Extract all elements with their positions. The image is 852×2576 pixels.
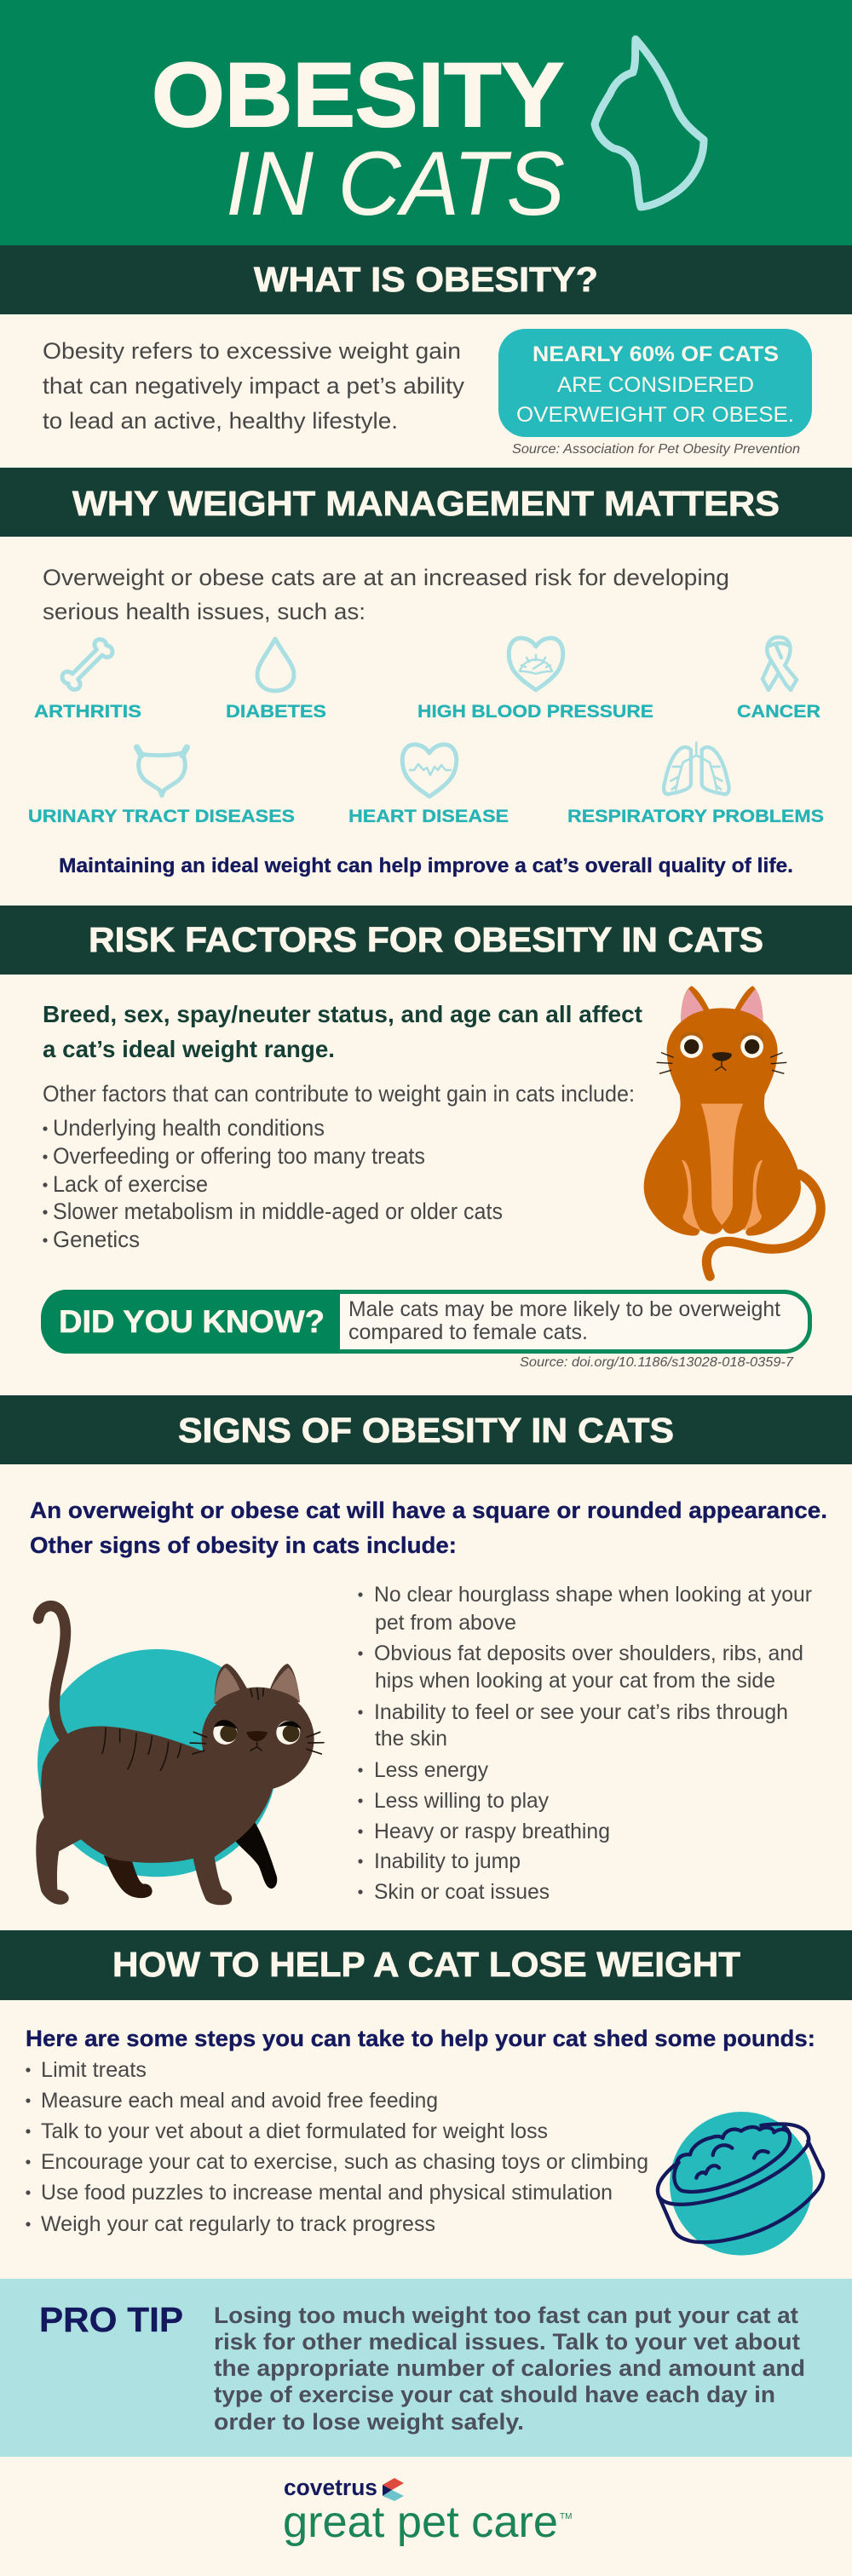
logo: covetrus great pet care xyxy=(283,2475,572,2547)
title xyxy=(152,43,565,234)
label: arthritis: ARTHRITIS xyxy=(34,702,141,722)
bold intro xyxy=(30,1498,827,1558)
definition text: to lead an active, healthy lifestyle. xyxy=(43,408,398,434)
steps list: Talk to your vet about a diet formulated for weight loss xyxy=(41,2119,548,2143)
pro tip label: PRO TIP xyxy=(39,2300,183,2339)
closing statement: Maintaining an ideal weight can help improve a cat’s overall quality of life. xyxy=(59,854,793,877)
pro tip text: the appropriate number of calories and amount and xyxy=(214,2355,805,2381)
icon: food bowl xyxy=(658,2112,823,2256)
definition text xyxy=(43,338,465,434)
factor list: Underlying health conditions xyxy=(53,1115,325,1141)
factor list: Other factors that can contribute to weight gain in cats include: xyxy=(43,1081,635,1107)
section: signs of obesity xyxy=(0,1395,852,1905)
title: IN CATS xyxy=(226,132,565,234)
logo: covetrus great pet care: covetrus xyxy=(284,2475,377,2500)
icon: lungs xyxy=(664,743,729,794)
factor list: Lack of exercise xyxy=(53,1171,208,1197)
steps list: Weigh your cat regularly to track progress xyxy=(41,2212,435,2236)
signs list: Inability to feel or see your cat’s ribs through xyxy=(374,1700,788,1724)
pro tip text: Losing too much weight too fast can put your cat at xyxy=(214,2303,798,2328)
icon: covetrus mark xyxy=(383,2478,404,2501)
signs list: Inability to jump xyxy=(374,1849,521,1873)
icon: ribbon xyxy=(763,637,797,690)
heading: SIGNS OF OBESITY IN CATS xyxy=(178,1411,674,1450)
icon: bone xyxy=(60,636,115,693)
intro text: serious health issues, such as: xyxy=(43,599,366,624)
callout: did you know xyxy=(41,1290,809,1354)
icon: cat outline xyxy=(595,39,704,207)
heading: HOW TO HELP A CAT LOSE WEIGHT xyxy=(112,1945,740,1984)
callout: nearly 60%: OVERWEIGHT OR OBESE. xyxy=(516,403,794,427)
icon: drop xyxy=(257,639,294,691)
heading: WHY WEIGHT MANAGEMENT MATTERS xyxy=(72,484,780,523)
bold intro: a cat’s ideal weight range. xyxy=(43,1036,335,1062)
label: respiratory problems: RESPIRATORY PROBLEMS xyxy=(567,807,824,826)
header panel xyxy=(0,0,852,245)
section: how to help xyxy=(0,1930,852,2256)
factor list: Genetics xyxy=(53,1227,140,1252)
pro tip text: risk for other medical issues. Talk to your vet about xyxy=(214,2329,800,2355)
steps list: Use food puzzles to increase mental and physical stimulation xyxy=(41,2181,613,2205)
intro text: Overweight or obese cats are at an increased risk for developing xyxy=(43,565,729,590)
signs list: Obvious fat deposits over shoulders, ribs, and xyxy=(374,1642,803,1665)
callout: did you know: Male cats may be more likely to be overweight xyxy=(348,1297,780,1321)
icon: heart with gauge xyxy=(509,638,563,690)
section: risk factors xyxy=(0,906,852,1370)
bold intro: Here are some steps you can take to help your cat shed some pounds: xyxy=(26,2026,815,2051)
label: urinary tract diseases: URINARY TRACT DISEASES xyxy=(28,807,295,826)
bold intro xyxy=(43,1001,642,1062)
callout: did you know: compared to female cats. xyxy=(348,1320,588,1344)
label: high blood pressure: HIGH BLOOD PRESSURE xyxy=(417,702,653,722)
callout: nearly 60% xyxy=(498,329,812,437)
label: heart disease: HEART DISEASE xyxy=(348,807,509,826)
signs list: pet from above xyxy=(375,1611,516,1635)
signs list: Heavy or raspy breathing xyxy=(374,1820,610,1843)
illustration: orange sitting cat xyxy=(644,986,820,1276)
bold intro: An overweight or obese cat will have a square or rounded appearance. xyxy=(30,1498,827,1523)
section: why weight management matters xyxy=(0,468,852,877)
definition text: that can negatively impact a pet’s ability xyxy=(43,373,465,399)
logo: covetrus great pet care: great pet care xyxy=(283,2498,558,2547)
logo: covetrus great pet care: TM xyxy=(560,2512,572,2521)
signs list: Less willing to play xyxy=(374,1789,549,1813)
bold intro: Breed, sex, spay/neuter status, and age can all affect xyxy=(43,1001,642,1027)
factor list xyxy=(43,1081,635,1252)
callout: did you know: DID YOU KNOW? xyxy=(59,1304,325,1339)
icon: bladder xyxy=(137,747,187,796)
pro tip text xyxy=(214,2303,805,2435)
icon: heart with pulse xyxy=(402,745,457,796)
heading: RISK FACTORS FOR OBESITY IN CATS xyxy=(89,920,763,959)
steps list: Encourage your cat to exercise, such as chasing toys or climbing xyxy=(41,2150,648,2174)
signs list: the skin xyxy=(375,1727,447,1751)
signs list: Skin or coat issues xyxy=(374,1880,550,1904)
label: cancer: CANCER xyxy=(737,702,820,722)
steps list: Measure each meal and avoid free feeding xyxy=(41,2089,438,2113)
steps list: Limit treats xyxy=(41,2058,147,2082)
signs list: Less energy xyxy=(374,1758,488,1782)
factor list: Slower metabolism in middle-aged or older cats xyxy=(53,1199,503,1224)
pro tip text: type of exercise your cat should have each day in xyxy=(214,2382,775,2407)
title: OBESITY xyxy=(152,43,564,146)
definition text: Obesity refers to excessive weight gain xyxy=(43,338,461,364)
bold intro: Other signs of obesity in cats include: xyxy=(30,1532,457,1558)
pro tip text: order to lose weight safely. xyxy=(214,2409,524,2435)
signs list: No clear hourglass shape when looking at your xyxy=(374,1583,812,1607)
source note: Source: doi.org/10.1186/s13028-018-0359-7 xyxy=(520,1355,794,1370)
panel: pro tip xyxy=(0,2279,852,2457)
signs list: hips when looking at your cat from the side xyxy=(375,1669,775,1693)
label: diabetes: DIABETES xyxy=(226,702,326,722)
callout: nearly 60%: NEARLY 60% OF CATS xyxy=(532,342,779,366)
heading: WHAT IS OBESITY? xyxy=(254,260,598,299)
section: what is obesity xyxy=(0,245,852,457)
factor list: Overfeeding or offering too many treats xyxy=(53,1143,425,1169)
source note: Source: Association for Pet Obesity Prevention xyxy=(512,442,800,457)
intro text xyxy=(43,565,729,624)
steps list xyxy=(26,2058,648,2236)
illustration: brown cat on teal circle xyxy=(36,1606,324,1905)
signs list xyxy=(358,1583,812,1904)
callout: nearly 60%: ARE CONSIDERED xyxy=(557,373,754,397)
